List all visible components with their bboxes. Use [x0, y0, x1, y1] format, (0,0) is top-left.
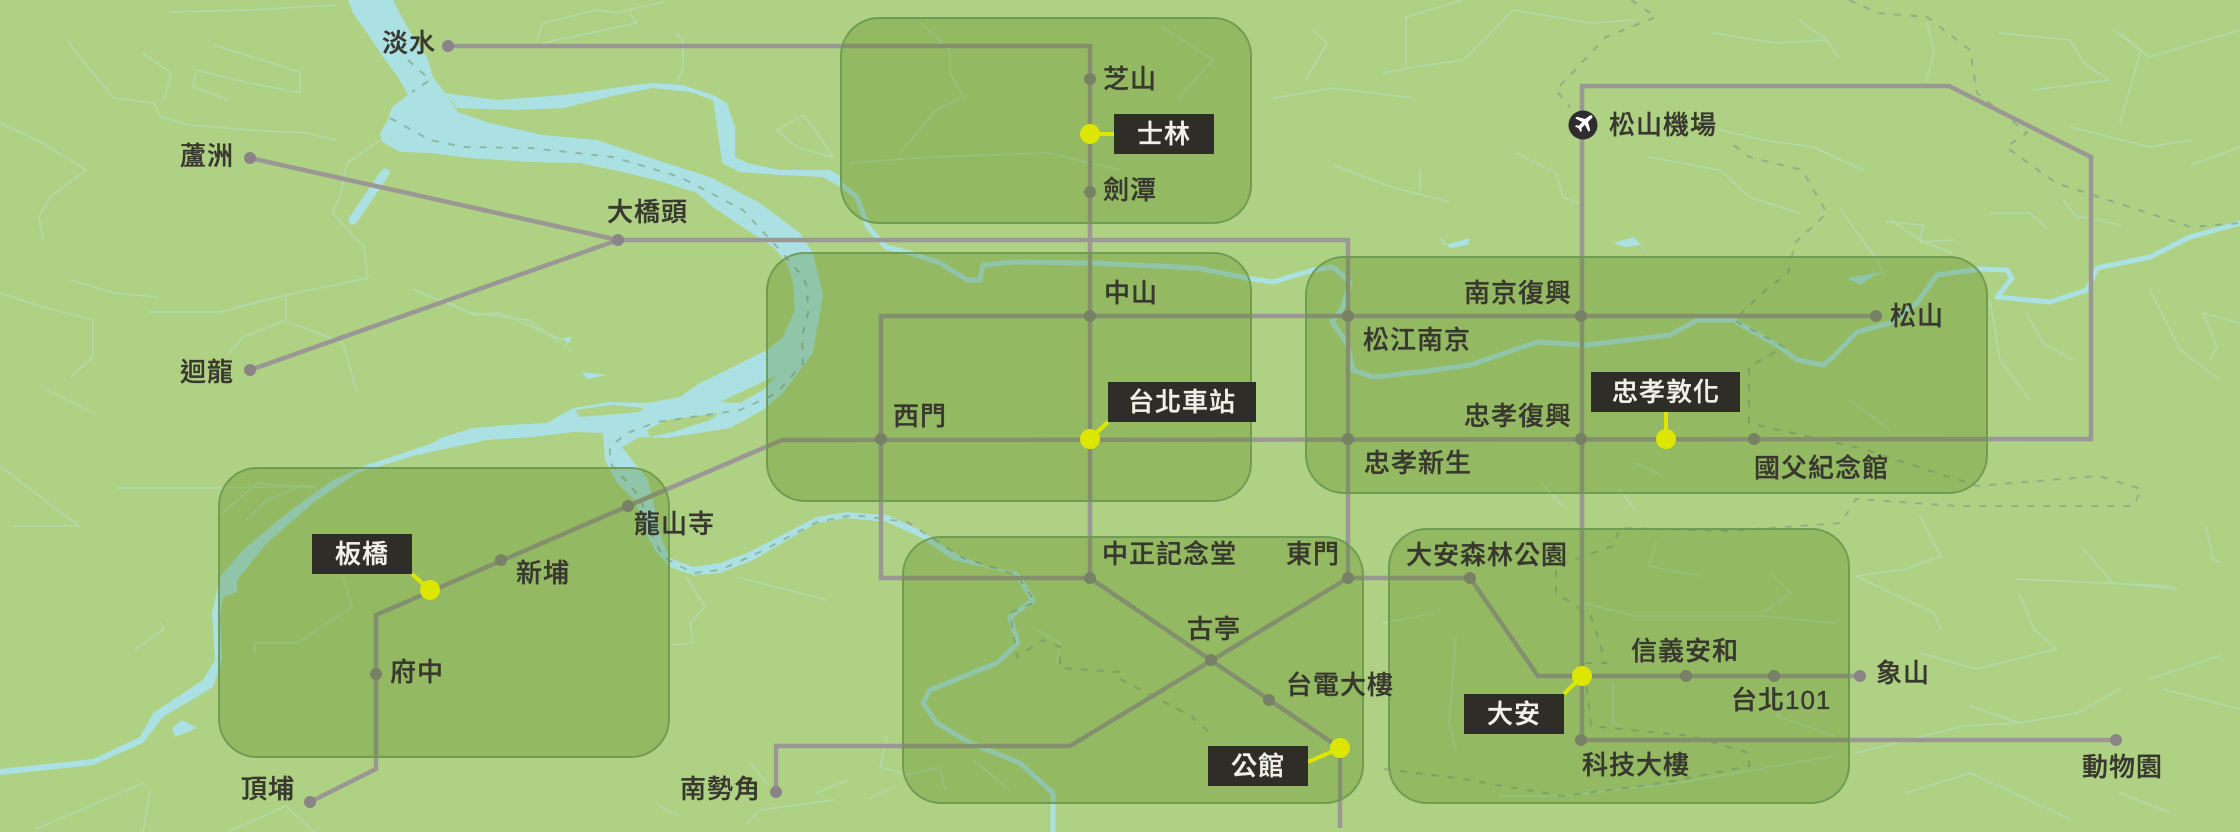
- label: Fuzhong: 府中: [390, 657, 444, 687]
- panel: Taipei Main Station: [767, 253, 1251, 501]
- label: Songjiang Nanjing: 松江南京: [1363, 325, 1471, 355]
- line: Nanshijiao: [776, 578, 1348, 792]
- callout: Daan: [1464, 666, 1592, 734]
- label: Xinyi Anhe: 信義安和: [1631, 636, 1739, 666]
- label: Chiang Kai-shek Memorial Hall: 中正記念堂: [1102, 539, 1237, 569]
- label: Zhongxiao Xinsheng: 忠孝新生: [1364, 448, 1472, 478]
- label: Zoo: 動物園: [2082, 752, 2163, 782]
- callout: Banqiao: 板橋: [335, 539, 389, 569]
- callout: Shilin: 士林: [1137, 119, 1191, 149]
- panel: Banqiao: [219, 468, 669, 757]
- label: Technology Building: 科技大樓: [1582, 750, 1690, 780]
- station dots: [244, 40, 2122, 808]
- label: Taipei 101: 台北101: [1731, 685, 1831, 715]
- label: Ximen: 西門: [893, 401, 947, 431]
- callout: Zhongxiao Dunhua: 忠孝敦化: [1612, 377, 1720, 407]
- label: Jiantan: 劍潭: [1103, 175, 1157, 205]
- label: Xinpu: 新埔: [516, 558, 570, 588]
- label: Songshan: 松山: [1890, 301, 1944, 331]
- river channels: [353, 173, 2240, 832]
- label: Daan Forest Park: 大安森林公園: [1406, 540, 1568, 570]
- metro lines: [244, 40, 2122, 828]
- callout: Gongguan: [1208, 738, 1350, 786]
- label: Huilong: 迴龍: [180, 357, 234, 387]
- label: Zhongshan: 中山: [1104, 278, 1158, 308]
- river: Tamsui and tributaries: [0, 0, 1880, 775]
- label: Tamsui: 淡水: [382, 28, 436, 58]
- line: Songshan: [881, 316, 1876, 578]
- river islands: [575, 375, 777, 437]
- label: Guting: 古亭: [1187, 614, 1241, 644]
- line: Xiangshan: [1348, 578, 1860, 676]
- label: Luzhou: 蘆洲: [180, 141, 234, 171]
- label: Sun Yat-sen Memorial Hall: 國父紀念館: [1754, 453, 1889, 483]
- callout: Taipei Main Station: 台北車站: [1128, 387, 1236, 417]
- label: Xiangshan: 象山: [1876, 658, 1930, 688]
- panel: Zhongxiao Dunhua: [1306, 257, 1987, 493]
- label: Nanshijiao: 南勢角: [680, 774, 761, 804]
- label: Dongmen: 東門: [1286, 539, 1340, 569]
- label: Daqiaotou: 大橋頭: [607, 197, 688, 227]
- label: Longshan Temple: 龍山寺: [634, 509, 715, 539]
- callout: Shilin: [1080, 114, 1214, 154]
- panel: Gongguan: [903, 537, 1363, 803]
- dashed boundary lines: [390, 0, 2240, 796]
- icon: airport: [1568, 110, 1598, 140]
- label: Songshan Airport: 松山機場: [1609, 110, 1717, 140]
- callout: Zhongxiao Dunhua: [1591, 372, 1740, 449]
- label: Zhishan: 芝山: [1103, 64, 1157, 94]
- callout: Daan: 大安: [1487, 699, 1541, 729]
- line: Bannan: [310, 86, 2116, 802]
- callout: Taipei Main Station: [1080, 382, 1256, 449]
- highlighted area panels: [219, 18, 1987, 803]
- label: Dingpu: 頂埔: [241, 774, 295, 804]
- label: Zhongxiao Fuxing: 忠孝復興: [1464, 401, 1572, 431]
- callout: Gongguan: 公館: [1231, 751, 1285, 781]
- callout: Banqiao: [312, 534, 440, 600]
- line: Luzhou and Huilong to Songshan airport connector: [250, 158, 1348, 578]
- panel: Daan: [1389, 529, 1849, 803]
- label: Nanjing Fuxing: 南京復興: [1464, 278, 1572, 308]
- panel: Shilin: [841, 18, 1251, 223]
- line: Tamsui to Xiaobitan: [448, 46, 1340, 828]
- label: Taipower Building: 台電大樓: [1286, 670, 1394, 700]
